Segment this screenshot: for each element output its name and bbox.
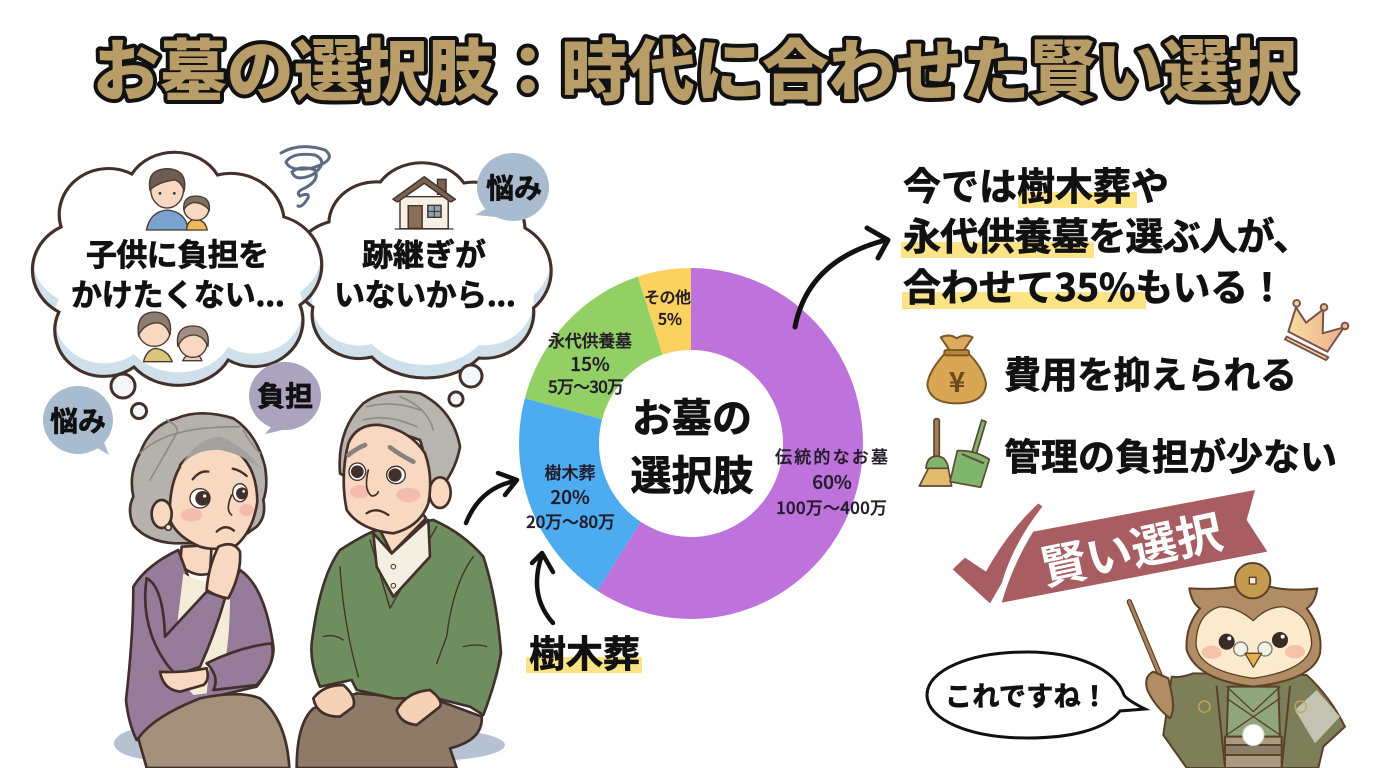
speech bubble: 悩み right [475,153,549,221]
speech bubble: 負担 [249,362,321,434]
tree burial label: 樹木葬 [529,624,640,678]
benefit: lower cost [927,336,1297,403]
wise choice banner group [953,490,1267,603]
ribbon [1002,490,1267,603]
donut centre label: 選択肢 [630,442,754,502]
panel: worries thought clouds [32,139,551,455]
speech bubble: 悩み left: 悩み [50,400,106,440]
segment: tree burial 20% [519,398,641,591]
benefit: less maintenance: 管理の負担が少ない [1004,427,1337,481]
donut centre label [630,386,754,502]
icon: grandchildren [138,312,208,362]
benefit: lower cost: ¥ [949,361,966,401]
speech bubble: 悩み right: 悩み [486,167,542,207]
icon: house [393,177,455,229]
label: traditional: 60% [812,468,852,495]
icon: swirl [281,147,329,206]
icon: broom and dustpan [919,419,989,487]
check mark [953,503,1042,603]
speech bubble: 負担: 負担 [257,375,313,415]
thought bubbles [111,365,482,418]
owl hand [1146,672,1173,718]
donut centre label: お墓の [632,386,752,444]
text: no burden on children: 子供に負担を [86,230,269,275]
icon: parent and child [146,169,209,230]
label: traditional: 伝統的なお墓 [775,443,888,468]
text: no successor [334,230,516,315]
label: other: その他 [644,284,691,308]
text: no successor: 跡継ぎが [362,230,486,275]
elderly woman [126,413,289,768]
arrow: label to blue segment [532,553,553,623]
icon: money bag [927,336,986,403]
donut chart [519,268,888,619]
benefit: less maintenance [919,419,1337,487]
text: no burden on children [71,230,285,315]
headline message: 合わせて35%もいる！ [903,257,1286,312]
illustration: elderly couple [114,391,505,768]
label: perpetual memorial: 永代供養墓 [548,327,632,352]
segment: other 5% [638,268,691,355]
text: no burden on children: かけたくない... [71,270,285,315]
owl head [1186,587,1321,687]
arrow: couple to chart [466,473,517,523]
label: tree burial: 20万～80万 [526,508,615,533]
label: perpetual memorial: 15% [570,350,610,377]
arrow: chart to message [795,228,888,327]
speech bubble: これですね！ [927,652,1145,738]
speech bubble: 悩み left [43,386,113,455]
speech bubble: これですね！: これですね！ [945,675,1108,714]
coin [1235,563,1270,598]
pointer stick [1129,602,1161,677]
owl mascot [1129,563,1345,768]
shadows [114,727,505,761]
label: other [644,284,691,330]
ribbon text: 賢い選択 [1034,496,1228,599]
segment: perpetual memorial 15% [525,277,663,419]
kimono [1163,673,1345,768]
segment: traditional 60% [597,268,863,619]
icon: crown [1285,300,1348,360]
benefit: lower cost: 費用を抑えられる [1004,345,1297,399]
woman body [126,550,273,740]
label: perpetual memorial [548,327,632,398]
title: お墓の選択肢：時代に合わせた賢い選択 [93,18,1297,115]
headline message [901,156,1311,312]
thought cloud: no successor [292,150,551,378]
label: perpetual memorial: 5万～30万 [548,373,624,398]
text: no successor: いないから... [334,270,516,315]
thought cloud: no burden on children [32,139,322,385]
label: other: 5% [658,306,682,330]
label: traditional: 100万～400万 [776,494,887,519]
headline message: 今では樹木葬や [903,156,1169,211]
label: tree burial [526,459,615,533]
label: tree burial: 樹木葬 [544,459,596,484]
headline message: 永代供養墓を選ぶ人が、 [903,206,1311,261]
label: traditional [775,443,888,519]
label: tree burial: 20% [550,483,590,510]
elderly man [297,391,501,768]
